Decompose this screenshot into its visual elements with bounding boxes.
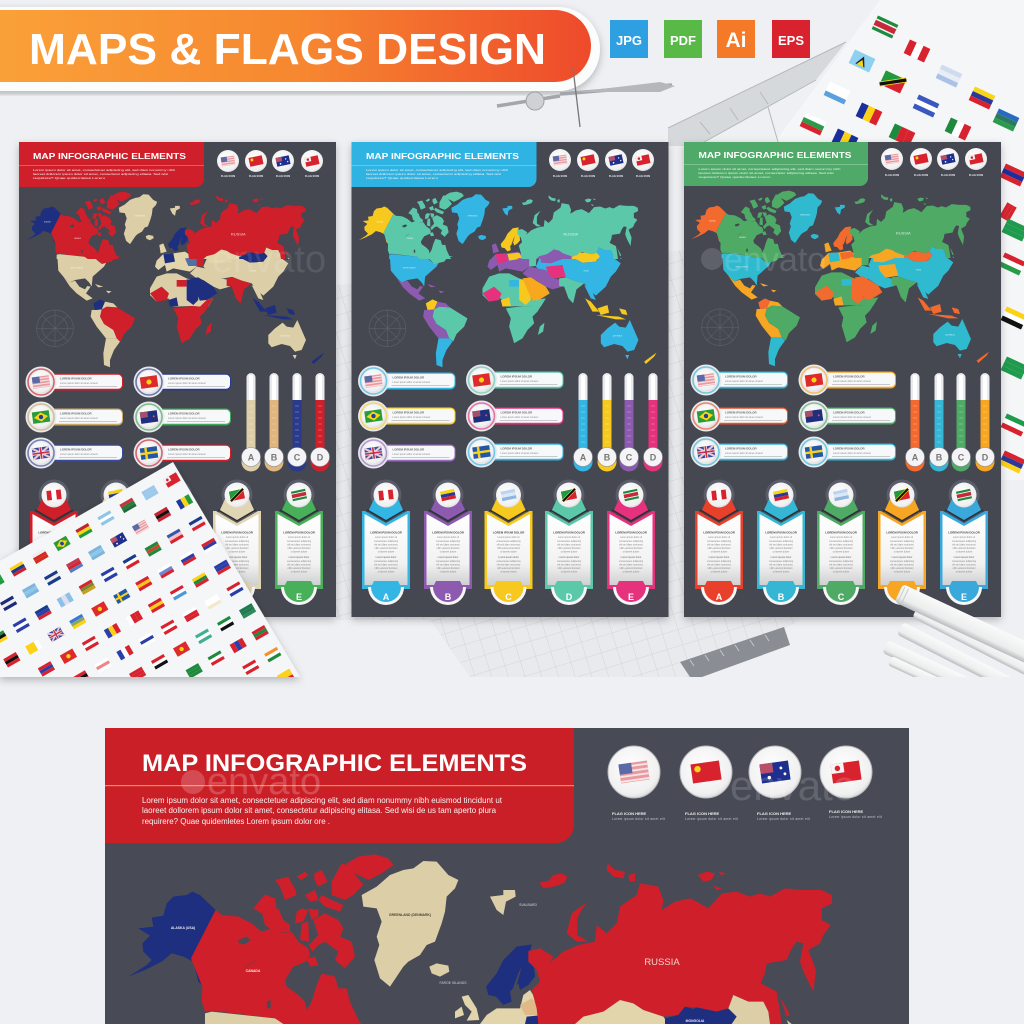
flag circles large: Lorem ipsum dolor sit amet elit <box>612 817 665 821</box>
header tab large: laoreet dollorem ipsum dolor sit amet, consectetur adipiscing elitasa. Sed wisi de us tam aperto plura <box>142 806 497 815</box>
info cards: E <box>296 592 302 602</box>
thermometer bars: D <box>982 452 989 462</box>
icon: JPG badge <box>610 20 648 58</box>
header tab large: MAP INFOGRAPHIC ELEMENTS <box>142 750 527 777</box>
flag circles large: Lorem ipsum dolor sit amet elit <box>757 817 810 821</box>
info cards: B <box>113 592 120 602</box>
envato watermark right: envato <box>730 762 856 809</box>
flag circles large: FLAG ICON HERE <box>757 811 792 816</box>
flag circles large: Lorem ipsum dolor sit amet elit <box>685 817 738 821</box>
rolled paper scrolls <box>884 585 1024 677</box>
info cards: A <box>383 592 390 602</box>
flag sheet lower left <box>0 462 302 684</box>
flag circles large <box>608 746 882 821</box>
info cards: B <box>445 592 452 602</box>
icon: drafting compass <box>497 68 675 127</box>
info cards: A <box>51 592 58 602</box>
map labels <box>171 903 705 1023</box>
poster 2: cyan, purple, yellow <box>352 142 668 617</box>
info cards: D <box>566 592 573 602</box>
flag circles large: Lorem ipsum dolor sit amet elit <box>829 815 882 819</box>
info cards: C <box>838 592 845 602</box>
set square ruler <box>668 42 846 146</box>
thermometer bars: A <box>912 452 919 462</box>
header tab <box>352 142 536 187</box>
icon: EPS badge: EPS <box>778 33 804 48</box>
flag circles: FLAG ICON <box>276 174 290 178</box>
info cards <box>362 480 655 605</box>
map labels: FAROE ISLANDS <box>440 981 467 985</box>
flags on top right sheet <box>800 15 1024 474</box>
info cards: A <box>716 592 723 602</box>
flag circles: FLAG ICON <box>305 174 319 178</box>
header tab large: requirere? Quae quidemletes Lorem ipsum dolor ore . <box>142 817 330 826</box>
steel ruler <box>680 627 790 677</box>
flag circles: FLAG ICON <box>249 174 263 178</box>
flag circles: FLAG ICON <box>941 173 955 177</box>
thermometer bars: D <box>650 452 657 462</box>
icon: Ai badge: Ai <box>726 29 746 52</box>
info cards: C <box>173 592 180 602</box>
large detail poster <box>105 728 909 1024</box>
header tab <box>19 142 204 187</box>
flag circles: FLAG ICON <box>609 174 623 178</box>
header tab large <box>105 728 574 843</box>
thermometer bars: C <box>626 452 633 462</box>
world map large: greenland and europe <box>362 861 588 1024</box>
thermometer bars: C <box>294 452 301 462</box>
header tab: MAP INFOGRAPHIC ELEMENTS <box>698 150 852 160</box>
envato watermark: envato <box>724 241 826 279</box>
cutting mat <box>336 250 800 677</box>
flag circles <box>217 150 323 178</box>
poster 3: green, orange, cyan <box>684 142 1001 617</box>
header tab: Lorem ipsum dolor sit amet, consectetuer adipiscing elit, sed diam nonummy nibh <box>366 168 509 172</box>
header tab <box>684 142 868 186</box>
header tab: MAP INFOGRAPHIC ELEMENTS <box>33 151 186 161</box>
flag circles: FLAG ICON <box>636 174 650 178</box>
info cards: D <box>234 592 241 602</box>
flag sheet top right <box>775 0 1024 480</box>
flag circles: FLAG ICON <box>914 173 928 177</box>
info cards: E <box>628 592 634 602</box>
header tab: requirere? Quae quidemletes Lorem <box>366 176 439 180</box>
thermometer bars: B <box>604 452 611 462</box>
world map large: russia and asia <box>528 863 832 1024</box>
icon: JPG badge: JPG <box>616 33 642 48</box>
thermometer bars: B <box>271 452 278 462</box>
map labels: ALASKA (USA) <box>171 926 195 930</box>
info cards: E <box>961 592 967 602</box>
header tab: requirere? Quae quidemletes Lorem <box>33 176 106 180</box>
flag circles: FLAG ICON <box>221 174 235 178</box>
flag circles large: FLAG ICON HERE <box>612 811 647 816</box>
map labels: CANADA <box>246 969 261 973</box>
map labels: MONGOLIA <box>686 1019 705 1023</box>
flag circles <box>881 148 987 177</box>
thermometer bars: B <box>936 452 943 462</box>
header tab: laoreet dollorem ipsum dolor sit amet, consectetur adipiscing elitasa. Sed wisi <box>33 172 168 176</box>
icon: PDF badge <box>664 20 702 58</box>
pill callouts <box>358 364 564 468</box>
world map <box>359 192 656 367</box>
header tab: Lorem ipsum dolor sit amet, consectetuer adipiscing elit, sed diam nonummy nibh <box>33 168 176 172</box>
info cards: B <box>778 592 785 602</box>
map labels: RUSSIA <box>644 957 680 968</box>
world map <box>26 192 324 367</box>
flag circles large: FLAG ICON HERE <box>685 811 720 816</box>
map labels: SVALBARD <box>519 903 537 907</box>
pill callouts <box>690 364 896 468</box>
flag circles: FLAG ICON <box>581 174 595 178</box>
pill callouts <box>26 366 231 468</box>
info cards <box>695 480 988 605</box>
thermometer bars: A <box>248 452 255 462</box>
flag circles: FLAG ICON <box>553 174 567 178</box>
header tab: laoreet dollorem ipsum dolor sit amet, consectetur adipiscing elitasa. Sed wisi <box>366 172 501 176</box>
banner title: MAPS & FLAGS DESIGN <box>29 25 546 74</box>
flag circles: FLAG ICON <box>885 173 899 177</box>
icon: Ai badge <box>717 20 755 58</box>
desk props behind the posters <box>336 42 846 677</box>
header tab large: Lorem ipsum dolor sit amet, consectetuer adipiscing elit, sed diam nonummy nibh euismod tincidunt ut <box>142 796 503 805</box>
thermometer bars <box>906 373 994 472</box>
thermometer bars: C <box>958 452 965 462</box>
flag circles: FLAG ICON <box>969 173 983 177</box>
flag circles <box>549 149 654 178</box>
icon: EPS badge <box>772 20 810 58</box>
envato watermark left: envato <box>207 761 321 803</box>
world map <box>691 191 989 366</box>
envato watermark: envato <box>212 239 326 281</box>
header tab: Lorem ipsum dolor sit amet, consectetuer adipiscing elit, sed diam nonummy nibh <box>698 167 841 171</box>
header tab: laoreet dollorem ipsum dolor sit amet, consectetur adipiscing elitasa. Sed wisi <box>698 171 834 175</box>
world map large: north america <box>128 854 393 1024</box>
poster 1: red and navy <box>19 142 336 617</box>
info cards: D <box>899 592 906 602</box>
flag circles large: FLAG ICON HERE <box>829 809 864 814</box>
thermometer bars <box>242 373 330 472</box>
icon: PDF badge: PDF <box>670 33 696 48</box>
header banner <box>0 7 600 91</box>
info cards: C <box>505 592 512 602</box>
header tab: MAP INFOGRAPHIC ELEMENTS <box>366 151 519 161</box>
header tab: requirere? Quae quidemletes Lorem <box>698 175 771 179</box>
thermometer bars: D <box>317 452 324 462</box>
map labels: GREENLAND (DENMARK) <box>389 913 431 917</box>
thermometer bars: A <box>580 452 587 462</box>
thermometer bars <box>574 373 662 472</box>
info cards <box>30 480 323 605</box>
